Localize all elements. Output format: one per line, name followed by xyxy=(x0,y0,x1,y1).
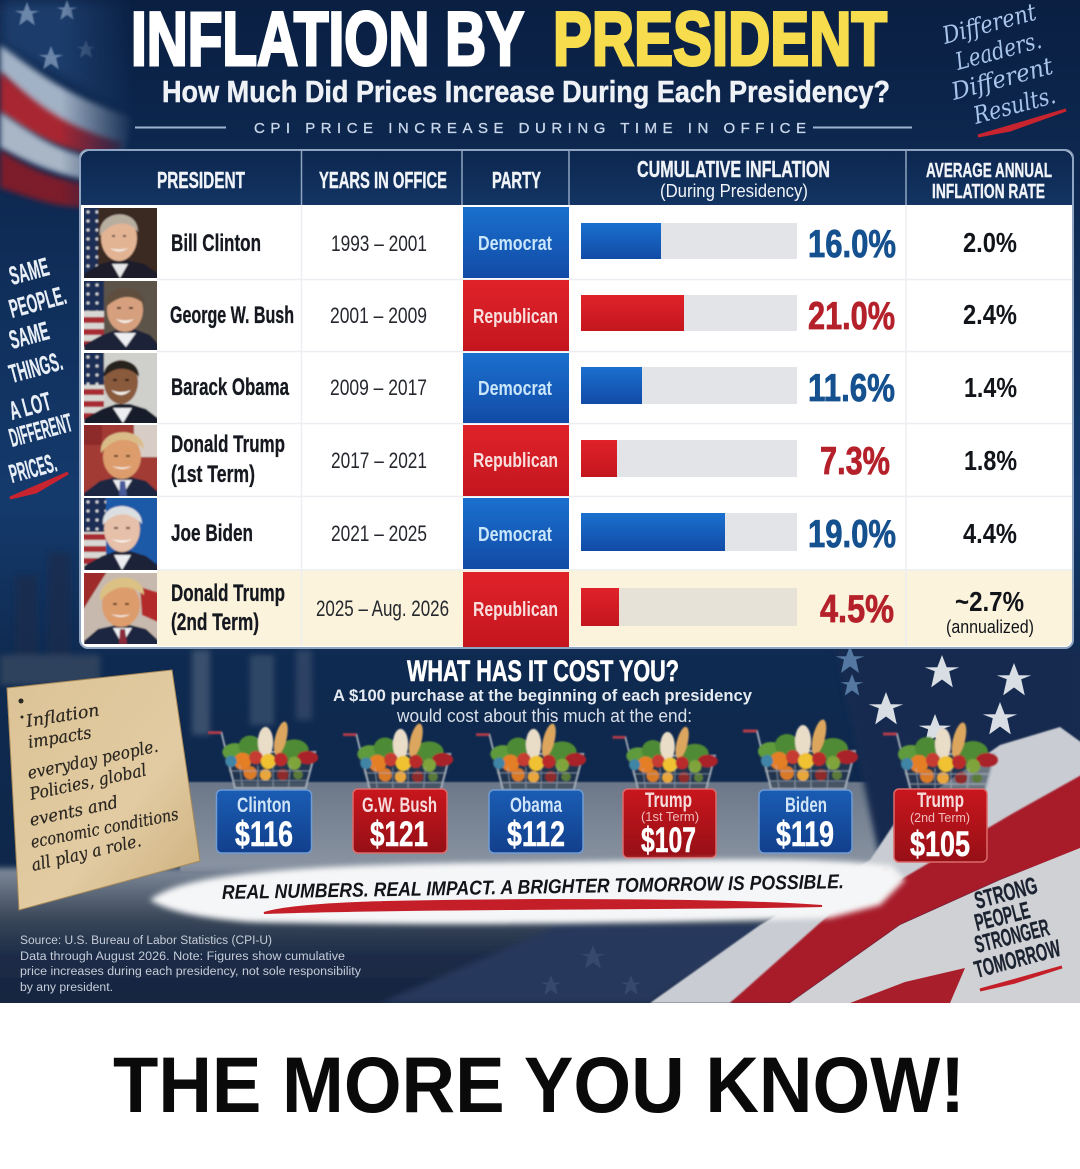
card: Clinton xyxy=(216,790,312,854)
card: Trump first term: $107 xyxy=(641,821,696,860)
table header: (During Presidency) xyxy=(660,181,808,201)
city skyline xyxy=(0,552,312,735)
card: Clinton: $116 xyxy=(235,815,293,854)
cumulative percentages: 16.0% xyxy=(808,223,896,266)
note paper xyxy=(7,670,200,910)
cumulative percentages: 4.5% xyxy=(820,588,894,631)
years in office: 2017 – 2021 xyxy=(331,448,427,473)
note paper: everyday people. xyxy=(26,737,160,784)
callout: different leaders: Leaders. xyxy=(951,26,1045,76)
portrait: George W. Bush xyxy=(84,281,157,350)
banner: real numbers xyxy=(150,860,905,924)
note paper: Inflation xyxy=(24,701,101,732)
card: Trump first term xyxy=(623,789,716,860)
bar chart: cumulative inflation xyxy=(581,223,797,626)
callout: different leaders: Results. xyxy=(969,81,1059,130)
portrait: Bill Clinton xyxy=(84,208,157,278)
card: Biden xyxy=(759,790,852,854)
table header: PARTY xyxy=(492,167,541,193)
cumulative percentages: 7.3% xyxy=(820,440,890,483)
callout: same people: THINGS. xyxy=(6,346,66,389)
years in office: 2025 – Aug. 2026 xyxy=(316,596,449,621)
callout: different leaders: Different xyxy=(947,52,1056,106)
average annual rates: 4.4% xyxy=(963,518,1017,549)
president names: Barack Obama xyxy=(171,374,289,401)
source note: Source: U.S. Bureau of Labor Statistics (CPI-U) xyxy=(20,935,272,947)
card: Biden: $119 xyxy=(776,815,834,854)
party labels: Democrat xyxy=(478,378,552,400)
highlighted row background xyxy=(157,570,1072,646)
party labels: Republican xyxy=(473,599,558,621)
president names: Donald Trump xyxy=(171,431,285,458)
president names xyxy=(170,230,294,636)
cost section heading: A $100 purchase at the beginning of each presidency xyxy=(333,686,753,705)
card: Clinton: Clinton xyxy=(237,794,291,817)
card: Obama xyxy=(489,790,583,854)
party labels: Republican xyxy=(473,306,558,328)
callout: same people: PEOPLE. xyxy=(6,280,70,324)
years in office: 1993 – 2001 xyxy=(331,231,427,256)
table panel xyxy=(80,150,1073,648)
note paper: events and xyxy=(28,793,120,831)
average annual rates xyxy=(946,227,1034,637)
table header: YEARS IN OFFICE xyxy=(319,167,447,193)
portrait: Donald Trump second term xyxy=(84,573,157,644)
callout: same people: A LOT xyxy=(6,386,54,426)
table header xyxy=(81,151,1072,205)
banner: real numbers: REAL NUMBERS. REAL IMPACT. A BRIGHTER TOMORROW IS POSSIBLE. xyxy=(222,871,844,904)
callout: strong people xyxy=(972,872,1064,990)
note paper: Policies, global xyxy=(27,761,148,805)
cumulative percentages: 19.0% xyxy=(808,513,896,556)
source note xyxy=(20,935,361,994)
shopping carts xyxy=(208,718,998,792)
callout: different leaders xyxy=(938,0,1066,136)
years in office: 2021 – 2025 xyxy=(331,521,427,546)
title xyxy=(131,0,887,82)
portrait: Donald Trump first term xyxy=(84,425,157,496)
callout: strong people: STRONG xyxy=(972,872,1040,915)
callout: same people: SAME xyxy=(6,315,52,355)
card: Trump first term: (1st Term) xyxy=(641,809,699,824)
table header: PRESIDENT xyxy=(157,167,245,193)
party labels: Democrat xyxy=(478,233,552,255)
president names: Donald Trump xyxy=(171,580,285,607)
card: Biden: Biden xyxy=(785,794,827,817)
caption: THE MORE YOU KNOW! xyxy=(113,1040,965,1129)
president names: George W. Bush xyxy=(170,302,294,329)
years in office: 2001 – 2009 xyxy=(330,303,427,328)
card: Trump second term xyxy=(894,789,987,864)
president names: (1st Term) xyxy=(171,461,255,488)
party column xyxy=(463,207,569,647)
subtitle: How Much Did Prices Increase During Each Presidency? xyxy=(162,74,890,109)
table header: CUMULATIVE INFLATION xyxy=(637,156,830,182)
callout: strong people: PEOPLE xyxy=(972,897,1033,937)
asphalt xyxy=(0,868,770,1013)
cost section heading: WHAT HAS IT COST YOU? xyxy=(407,655,679,688)
price cards xyxy=(216,789,987,864)
years in office: 2009 – 2017 xyxy=(330,375,427,400)
portrait: Barack Obama xyxy=(84,353,157,423)
card: Trump first term: Trump xyxy=(645,789,692,812)
card: Trump second term: (2nd Term) xyxy=(910,810,970,825)
faded lower flag xyxy=(380,925,770,1003)
card: Trump second term: Trump xyxy=(917,789,964,812)
years in office xyxy=(316,231,449,621)
text: DIFFERENT xyxy=(6,407,75,453)
average annual rates: 2.0% xyxy=(963,227,1017,258)
callout: same people: PRICES. xyxy=(6,447,60,489)
cost section heading xyxy=(333,655,753,726)
note paper: impacts xyxy=(27,723,93,753)
average annual rates: 1.8% xyxy=(964,445,1017,476)
average annual rates: ~2.7% xyxy=(955,586,1024,617)
source note: Data through August 2026. Note: Figures show cumulative xyxy=(20,951,345,963)
card: Trump second term: $105 xyxy=(910,825,970,864)
callout: same people: SAME xyxy=(6,251,52,291)
callout: same people xyxy=(6,251,75,498)
road xyxy=(180,782,940,872)
flag: bottom right xyxy=(650,646,1080,1003)
note paper: all play a role. xyxy=(30,831,143,876)
portrait: Joe Biden xyxy=(84,498,157,570)
average annual rates: 1.4% xyxy=(964,372,1017,403)
card: Obama: $112 xyxy=(507,815,565,854)
average annual rates: 2.4% xyxy=(963,299,1017,330)
president names: Bill Clinton xyxy=(171,230,261,257)
flag: top left xyxy=(0,0,135,208)
card: G.W. Bush xyxy=(353,789,447,854)
note paper: economic conditions xyxy=(29,805,180,853)
party labels xyxy=(473,233,558,621)
white caption area xyxy=(0,1003,1080,1169)
cumulative percentages: 21.0% xyxy=(808,295,895,338)
source note: price increases during each presidency, not sole responsibility xyxy=(20,966,361,978)
president names: (2nd Term) xyxy=(171,609,259,636)
card: G.W. Bush: G.W. Bush xyxy=(362,794,437,817)
card: Obama: Obama xyxy=(510,794,562,817)
president names: Joe Biden xyxy=(171,520,253,547)
cumulative percentages xyxy=(808,223,896,631)
cumulative percentages: 11.6% xyxy=(808,367,895,410)
cost section heading: would cost about this much at the end: xyxy=(396,706,692,726)
source note: by any president. xyxy=(20,982,113,994)
card: G.W. Bush: $121 xyxy=(370,815,428,854)
average annual rates: (annualized) xyxy=(946,617,1034,637)
strapline: CPI PRICE INCREASE DURING TIME IN OFFICE xyxy=(254,120,806,137)
party labels: Democrat xyxy=(478,524,552,546)
party labels: Republican xyxy=(473,450,558,472)
